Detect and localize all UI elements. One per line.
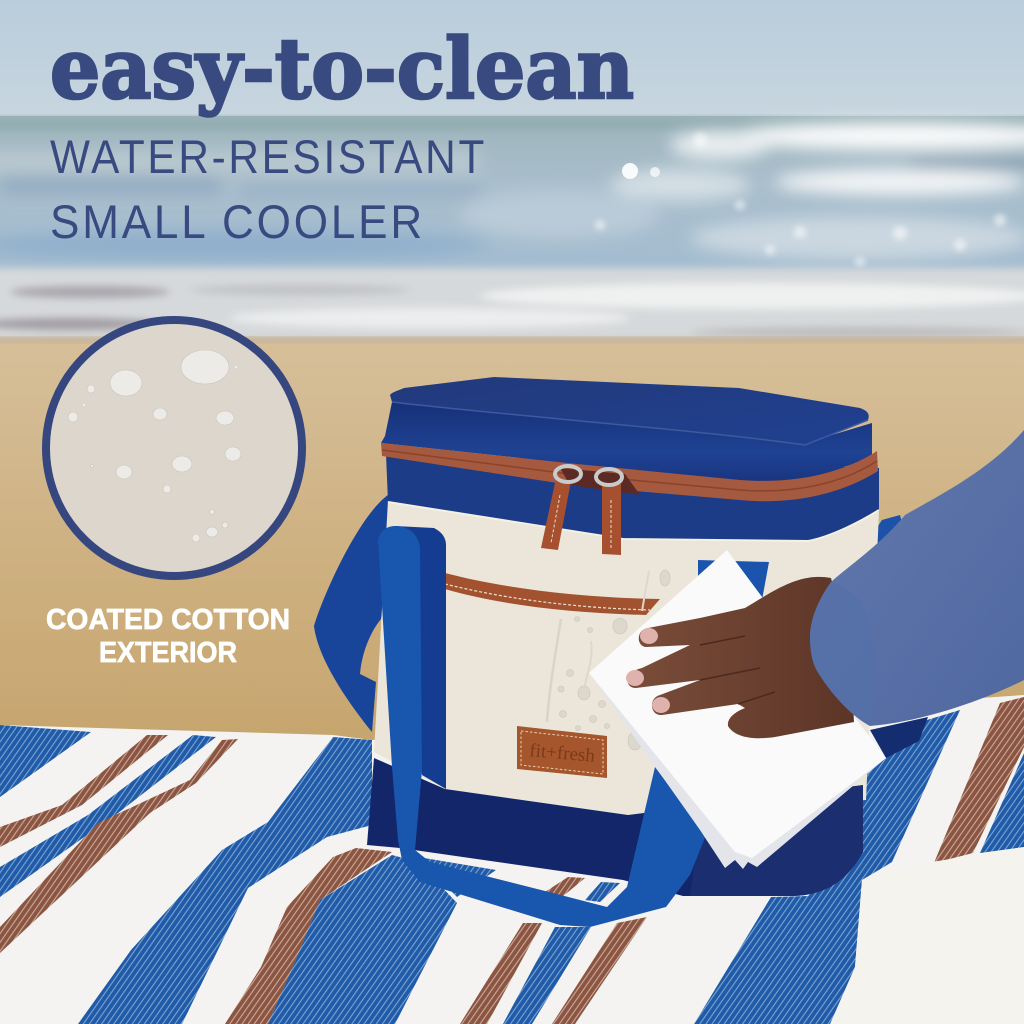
inset circle: coated cotton detail (46, 320, 302, 576)
subtitle line 2: SMALL COOLER (50, 195, 425, 248)
lid top (390, 377, 869, 445)
leather logo patch: fit+fresh (529, 740, 596, 767)
zipper pulls (541, 466, 622, 555)
paper towel (589, 550, 886, 869)
leather logo patch (517, 726, 607, 778)
white cloth corner (854, 847, 1024, 969)
side buckle (878, 515, 902, 544)
caption: coated cotton exterior: EXTERIOR (99, 637, 237, 669)
caption: coated cotton exterior: COATED COTTON (46, 604, 290, 636)
front strap (378, 526, 706, 927)
background: beach scene (0, 0, 1024, 740)
blue tab behind towel (698, 560, 769, 600)
striped towel (0, 695, 1024, 1024)
bright sun glints (622, 163, 660, 179)
lid front (381, 402, 872, 467)
back tab (870, 717, 928, 758)
lower dark band (386, 454, 879, 541)
hand (626, 577, 854, 738)
water drops and streaks (547, 570, 670, 750)
zipper (381, 443, 878, 501)
subtitle line 1: WATER-RESISTANT (50, 130, 487, 183)
cooler bag (314, 377, 928, 927)
back strap (314, 495, 392, 732)
title: easy-to-clean (50, 20, 634, 118)
canvas body (374, 500, 879, 815)
sweater sleeve (810, 430, 1024, 726)
front pocket trim (445, 573, 660, 615)
bottom navy band (367, 758, 863, 896)
